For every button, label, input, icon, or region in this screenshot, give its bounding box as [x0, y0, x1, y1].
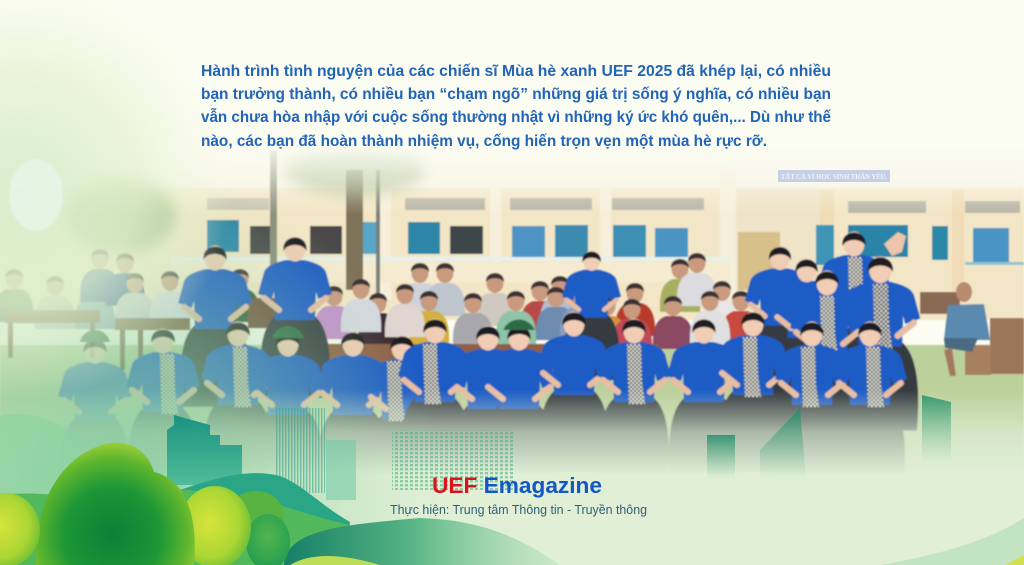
building: striped tower	[275, 408, 325, 493]
hill: dark front hill	[284, 518, 560, 565]
fade overlay: bottom	[0, 390, 1024, 475]
hill: green ridge	[0, 487, 350, 565]
bush: big green	[36, 443, 195, 565]
school sign	[778, 170, 890, 182]
fade overlay: upper left	[0, 0, 240, 420]
bush: far right green	[228, 491, 284, 539]
line 2: bạn trưởng thành, có nhiều bạn “chạm ngõ” những giá trị sống ý nghĩa, có nhiều bạn	[201, 86, 831, 103]
bush: lower right green	[246, 514, 290, 565]
magazine title: UEF Emagazine	[432, 473, 602, 498]
hill: yellow corner	[1005, 555, 1024, 565]
building: faded right tower 3	[707, 435, 735, 480]
building: mid tower	[326, 440, 356, 500]
school building	[0, 150, 1024, 320]
photo: volunteers at the school	[0, 146, 1024, 500]
standing volunteers	[178, 232, 920, 432]
building: faded right tower 1	[760, 408, 806, 480]
building: faded right tower 2	[922, 395, 951, 462]
front row volunteers	[58, 312, 907, 500]
pale circle decoration	[9, 159, 63, 231]
vents	[405, 198, 485, 210]
building: teal tower	[167, 415, 242, 485]
hill: right green corner	[880, 518, 1024, 565]
fade overlay: top	[0, 0, 1024, 215]
bush: left yellow	[0, 493, 40, 565]
hill: yellow foreground	[290, 556, 380, 565]
tree	[65, 146, 425, 300]
skyline buildings	[167, 395, 951, 500]
hill: pale left mound	[0, 414, 85, 495]
school sign: TẤT CẢ VÌ HỌC SINH THÂN YÊU.	[781, 173, 887, 181]
wooden tables	[5, 292, 1024, 375]
hill: dark teal ridge	[180, 473, 350, 565]
windows	[207, 220, 239, 252]
hills	[0, 414, 1024, 565]
waving hand	[884, 232, 906, 256]
courtyard ground	[0, 345, 1024, 485]
line 3: vẫn chưa hòa nhập với cuộc sống thường nhật vì những ký ức khó quên,... Dù như thế	[201, 109, 831, 126]
line 4: nào, các bạn đã hoàn thành nhiệm vụ, cống hiến trọn vẹn một mùa hè rực rỡ.	[201, 133, 767, 150]
intro paragraph	[201, 63, 831, 150]
line 1: Hành trình tình nguyện của các chiến sĩ Mùa hè xanh UEF 2025 đã khép lại, có nhiều	[201, 63, 831, 80]
seated crowd, back left	[0, 249, 260, 329]
credit line: Thực hiện: Trung tâm Thông tin - Truyền thông	[390, 502, 647, 517]
bush: yellow mid	[179, 486, 251, 565]
green hats	[80, 320, 535, 342]
brown tables behind volunteers	[308, 344, 658, 372]
railing	[170, 257, 730, 261]
building: dotted block	[392, 430, 514, 490]
seated crowd, centre	[314, 253, 761, 352]
seated man on the right	[944, 282, 990, 376]
